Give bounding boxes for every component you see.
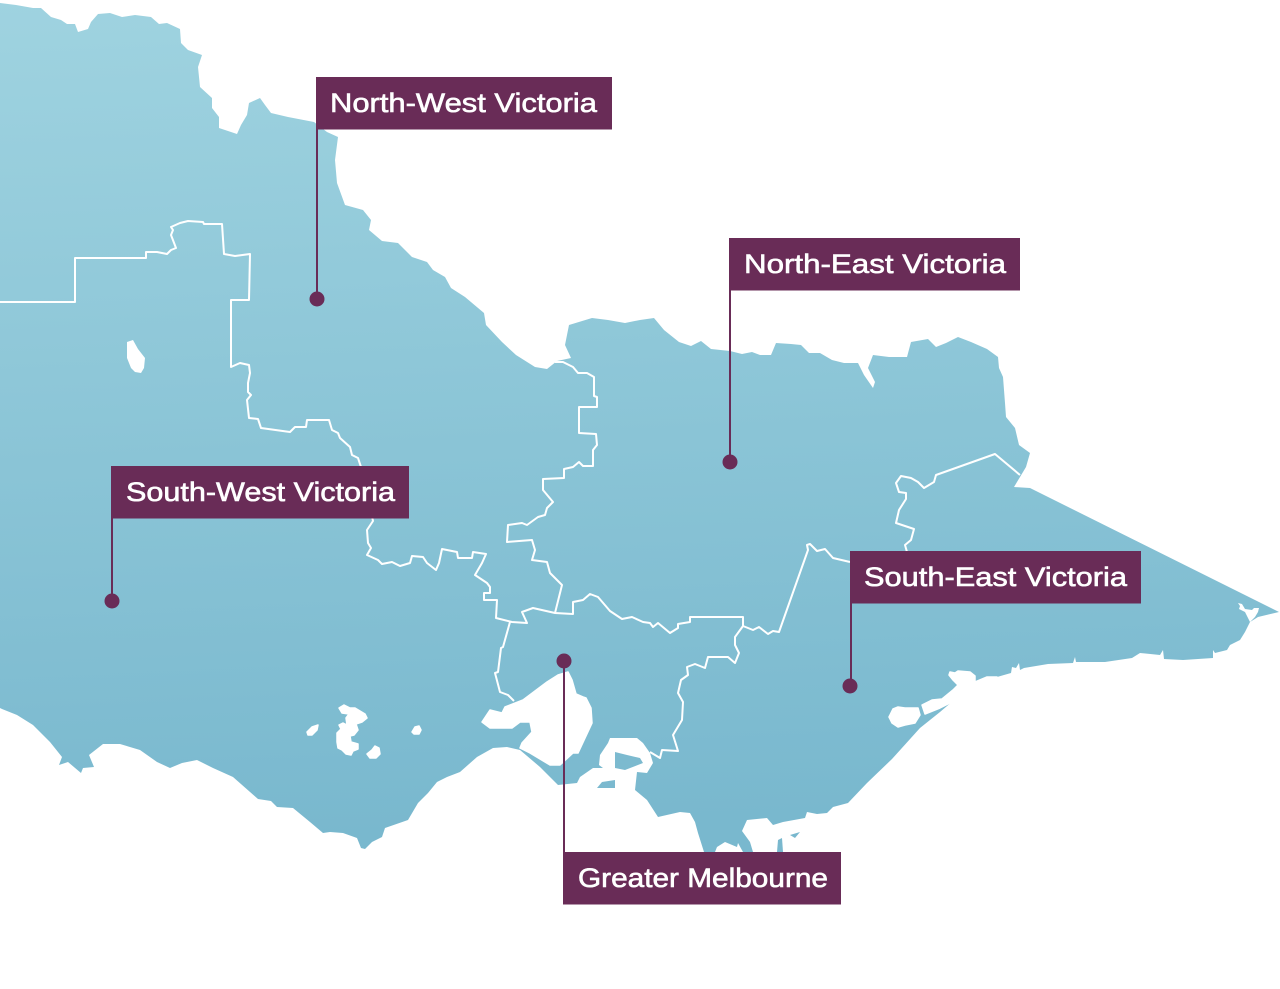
callout: North-West Victoria: [310, 77, 612, 306]
callout: South-West Victoria: South-West Victoria: [126, 477, 396, 507]
Lake Tyrrell: [127, 340, 145, 373]
Mallacoota inlet: [1238, 603, 1259, 622]
callout: Greater Melbourne: Greater Melbourne: [578, 863, 828, 893]
Port Phillip Bay: [482, 672, 592, 765]
callout: North-West Victoria: North-West Victoria: [330, 88, 598, 118]
French Island and Phillip Island: [597, 752, 800, 852]
western lakes: [307, 705, 421, 758]
callout: North-East Victoria: [722, 238, 1020, 470]
callout: North-East Victoria: North-East Victoria: [744, 249, 1007, 279]
callout: South-East Victoria: South-East Victoria: [864, 562, 1128, 592]
Gippsland Lakes: [889, 671, 997, 727]
regional boundaries: [0, 221, 1020, 758]
callout: South-East Victoria: [842, 551, 1141, 694]
callout: South-West Victoria: [104, 466, 409, 608]
callout: Greater Melbourne: [556, 654, 841, 904]
